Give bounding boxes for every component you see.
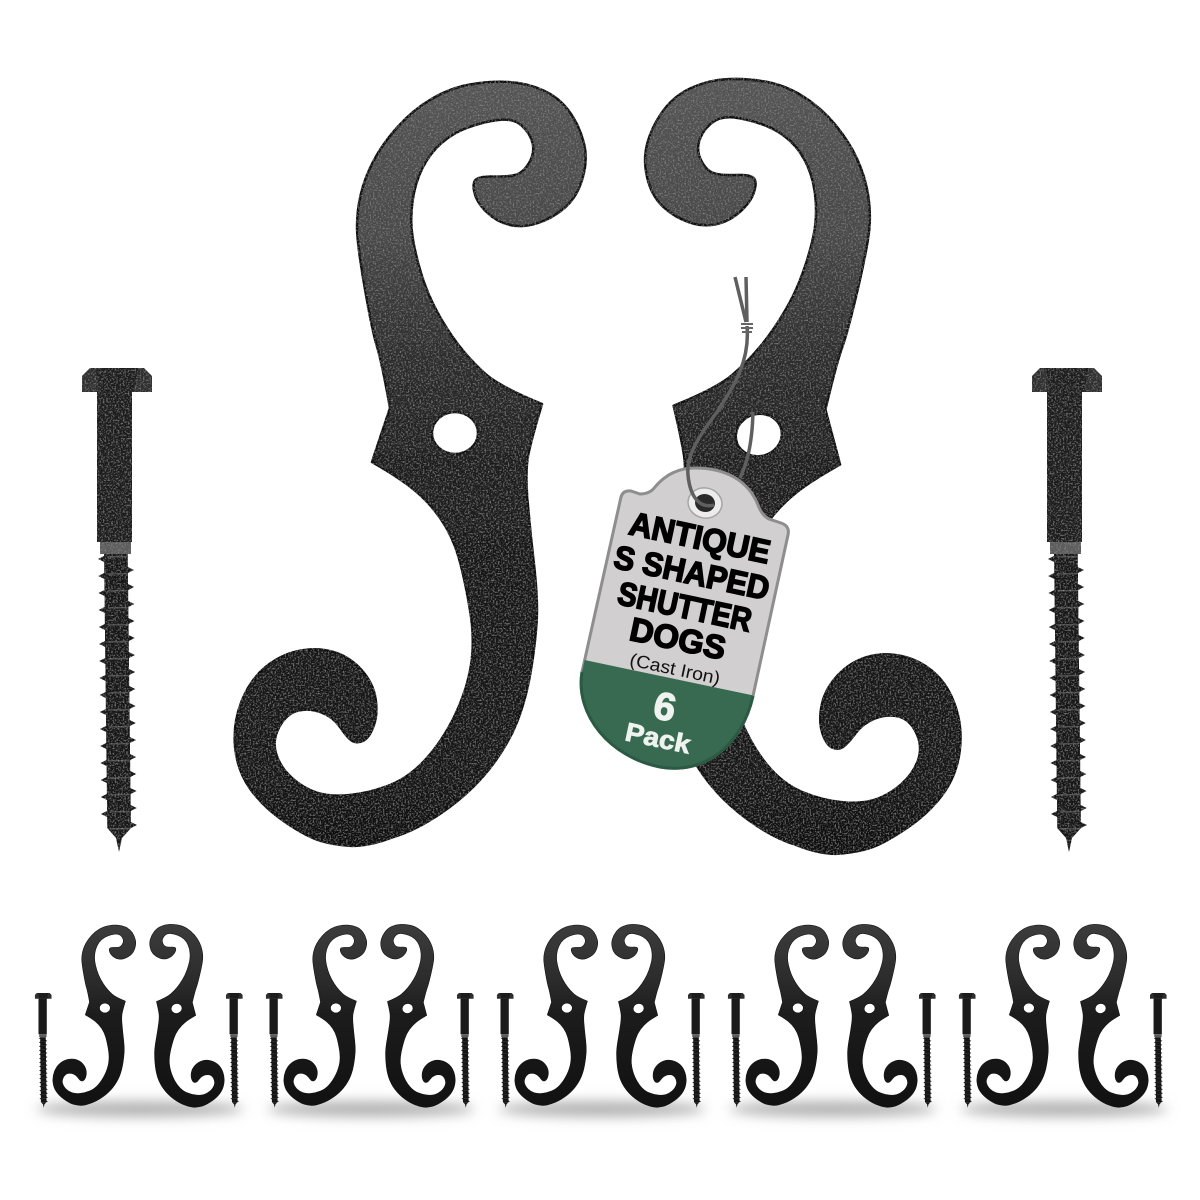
tag bottom outline	[581, 672, 753, 768]
mini set 3	[497, 924, 706, 1117]
pack label: Pack	[623, 716, 694, 760]
tag wire	[688, 277, 753, 506]
pack count: 6	[650, 684, 680, 731]
eyelet	[685, 485, 725, 521]
tag material note: (Cast Iron)	[628, 650, 722, 688]
tag title line 3: SHUTTER	[615, 574, 755, 639]
tag title line 4: DOGS	[627, 610, 729, 667]
tag body	[581, 468, 788, 768]
green tag band	[582, 660, 754, 767]
large shutter dog left	[235, 82, 586, 846]
mini set 2	[266, 924, 475, 1117]
large shutter dog right	[603, 79, 1001, 854]
wire behind tag	[740, 412, 753, 478]
tag title line 2: S SHAPED	[611, 538, 773, 607]
mini set 5	[959, 924, 1168, 1117]
large lag screw right	[1032, 368, 1102, 852]
tag title line 1: ANTIQUE	[626, 505, 774, 570]
mini set 1	[35, 924, 244, 1117]
mini set 4	[728, 924, 937, 1117]
large lag screw left	[82, 368, 152, 852]
hang tag	[580, 466, 790, 770]
